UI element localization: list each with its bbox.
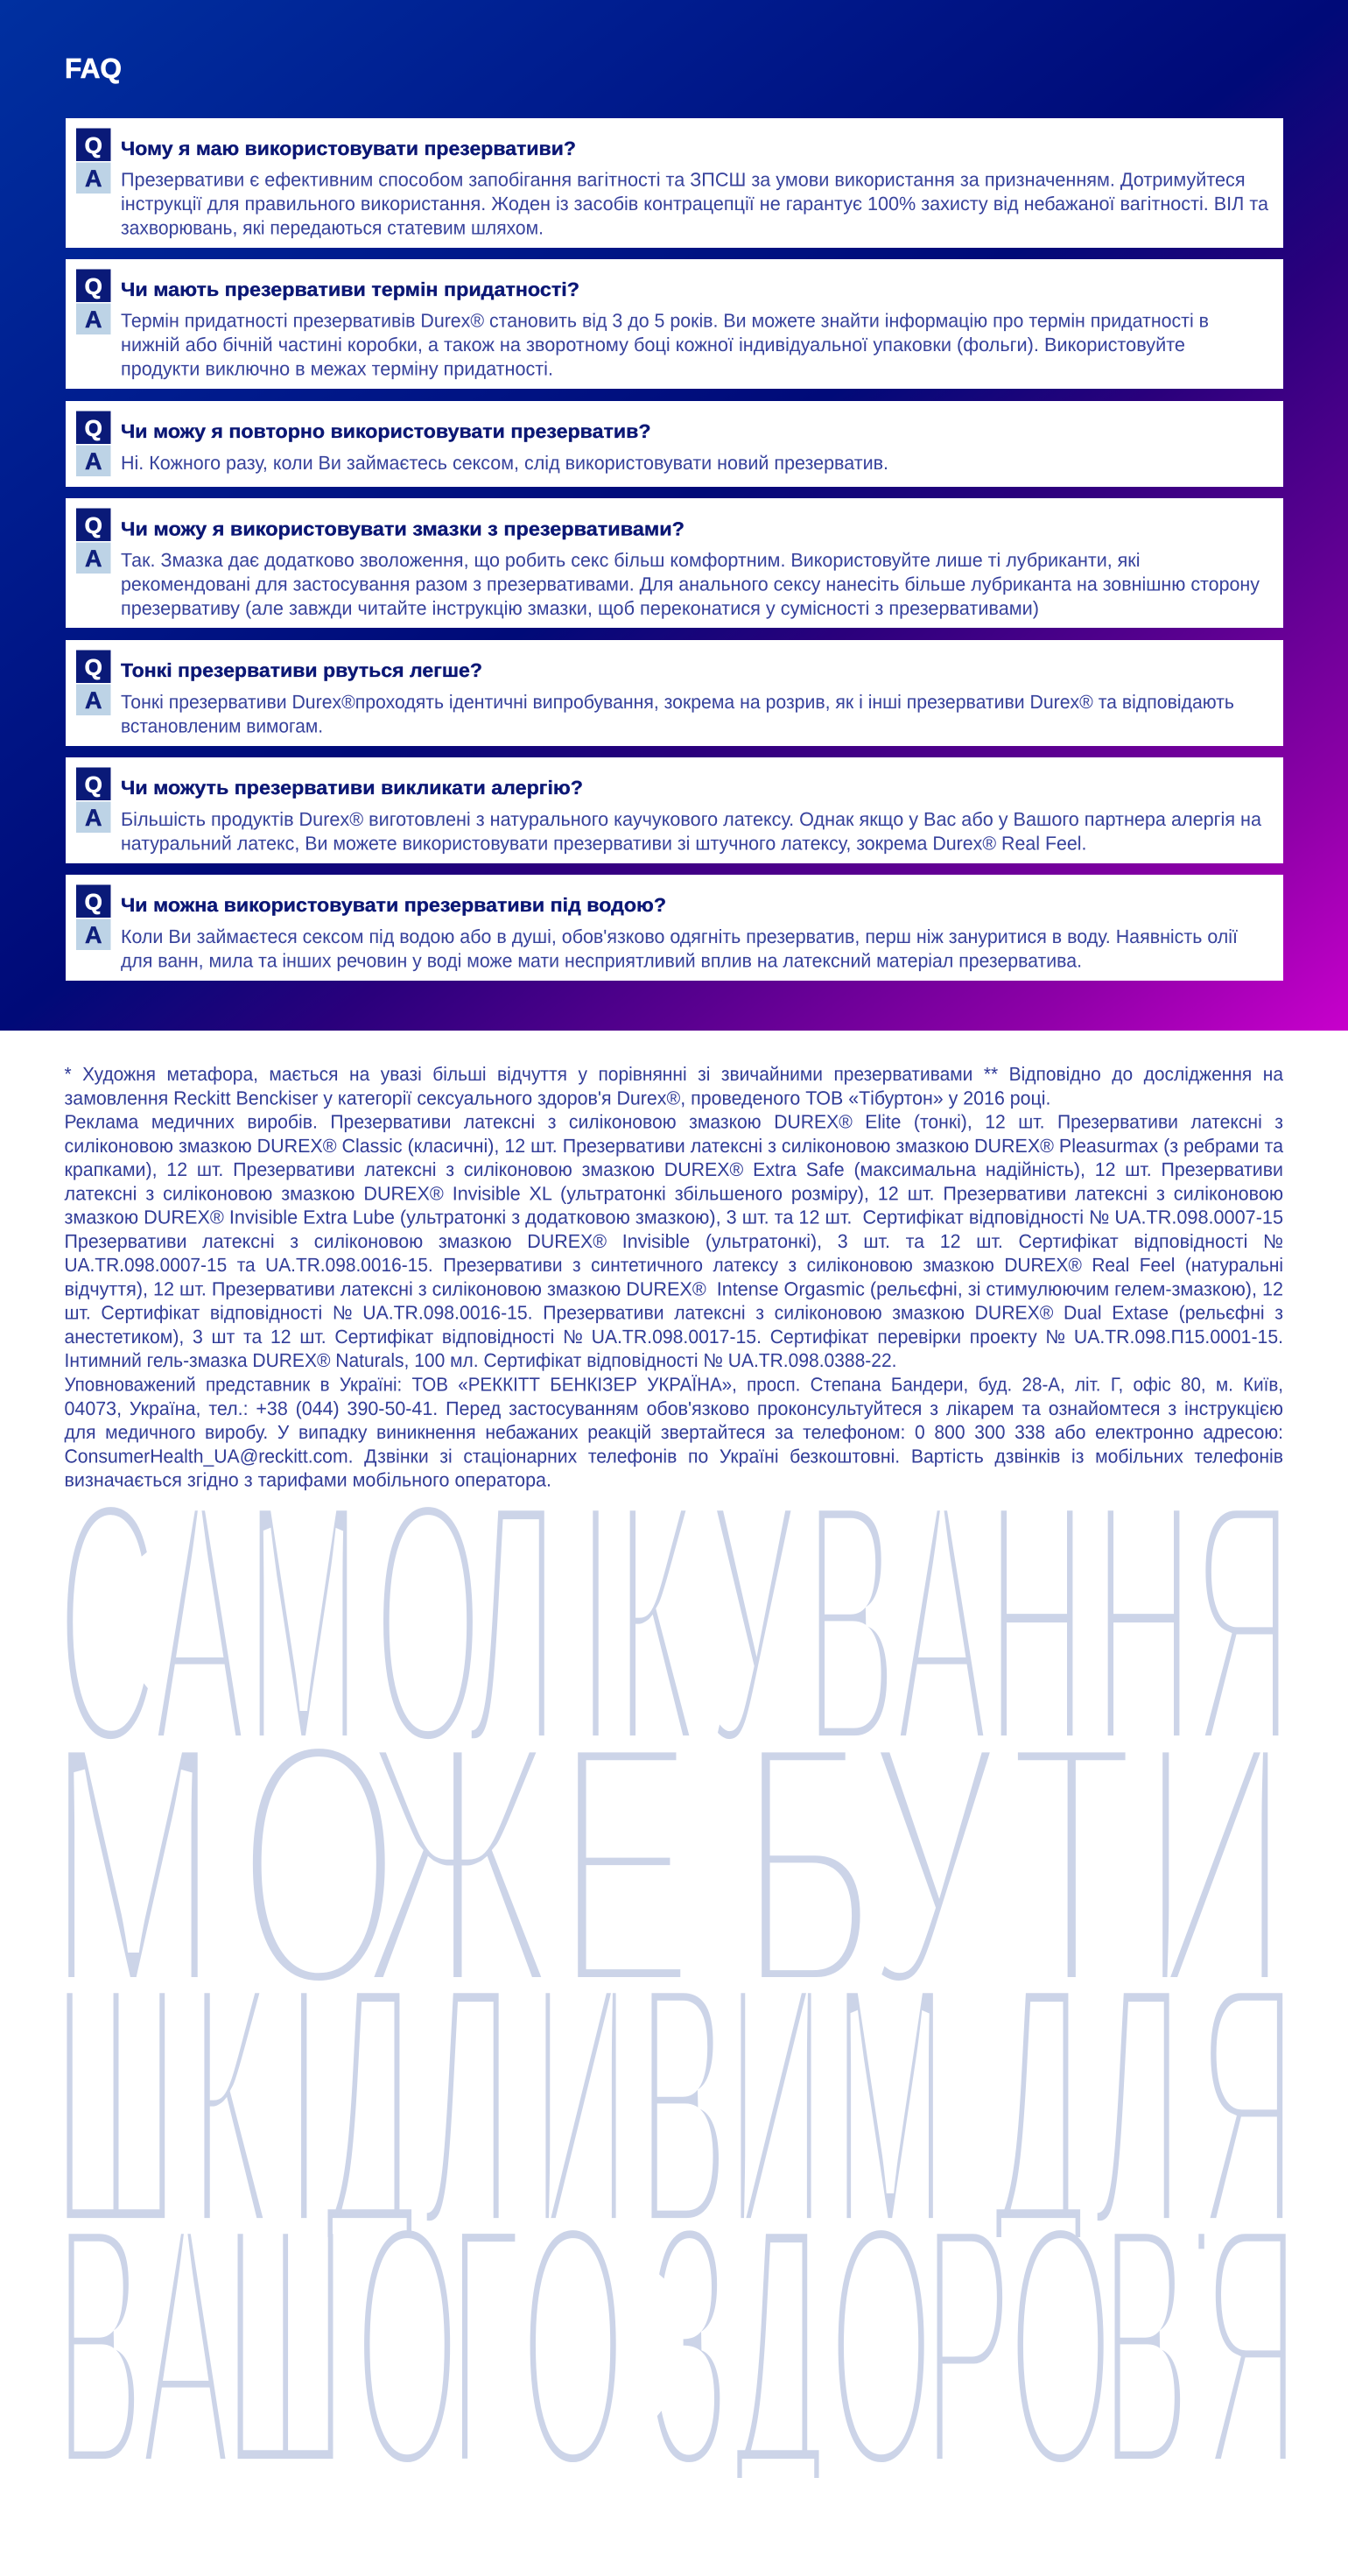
panel: question 7: для ванн, мила та інших речовин у воді може мати несприятливий вплив на латексний матеріал презерватива. <box>121 949 1082 972</box>
panel: question 2: Термін придатності презервативів Durex® становить від 3 до 5 років. Ви можете знайти інформацію про термін придатності в <box>121 310 1209 331</box>
panel: question 3: Ні. Кожного разу, коли Ви займаєтесь сексом, слід використовувати новий презерватив. <box>121 452 888 474</box>
panel: question 4 <box>66 498 1283 628</box>
panel: question 1: захворювань, які передаються статевим шляхом. <box>121 217 544 238</box>
footnotes and legal text: Презервативи латексні з силіконовою змазкою DUREX® Invisible (ультратонкі), 3 шт. та 12 шт. Сертифікат відповідності № <box>65 1230 1283 1252</box>
panel: question 4: Так. Змазка дає додатково зволоження, що робить секс більш комфортним. Використовуйте лише ті лубриканти, які <box>121 549 1140 571</box>
footnotes and legal text <box>65 1063 1284 1491</box>
footnotes and legal text: крапками), 12 шт. Презервативи латексні з силіконовою змазкою DUREX® Extra Safe (максимальна надійність), 12 шт. Презервативи <box>65 1158 1283 1180</box>
panel: question 2: Чи мають презервативи термін придатності? <box>121 278 579 300</box>
panel: question 4: презервативу (але завжди читайте інструкцію змазки, щоб переконатися у сумісності з презервативами) <box>121 597 1039 619</box>
panel: question 2: продукти виключно в межах терміну придатності. <box>121 357 553 380</box>
footnotes and legal text: анестетиком), 3 шт та 12 шт. Сертифікат відповідності № UA.TR.098.0017-15. Сертифікат перевірки проекту № UA.TR.098.П15.0001-15. <box>65 1326 1283 1348</box>
panel: question 4: A <box>85 545 102 572</box>
title: FAQ <box>65 53 122 84</box>
panel: question 3: Q <box>85 415 102 441</box>
panel: question 2 <box>66 259 1283 389</box>
large warning text: МОЖЕ БУТИ <box>46 1666 1290 2062</box>
footnotes and legal text: силіконовою змазкою DUREX® Classic (класичні), 12 шт. Презервативи латексні з силіконовою змазкою DUREX® Pleasurmax (з ребрами та <box>65 1135 1284 1157</box>
panel: question 2: A <box>85 306 102 333</box>
panel: question 5: Q <box>85 654 102 680</box>
footnotes and legal text: UA.TR.098.0007-15 та UA.TR.098.0016-15. Презервативи з синтетичного латексу з силіконовою змазкою DUREX® Real Feel (натуральні <box>65 1254 1283 1276</box>
footnotes and legal text: латексні з силіконовою змазкою DUREX® Invisible XL (ультратонкі збільшеного розміру), 12 шт. Презервативи латексні з силіконовою <box>65 1182 1283 1204</box>
panel: question 4: Чи можу я використовувати змазки з презервативами? <box>121 518 685 539</box>
panel: question 2: нижній або бічній частині коробки, а також на зворотному боці кожної індивідуальної упаковки (фольги). Використовуйте <box>121 334 1185 355</box>
panel: question 4: рекомендовані для застосування разом з презервативами. Для анального сексу нанесіть більше лубриканта на зовнішню сторону <box>121 573 1260 595</box>
panel: question 1: Q <box>85 132 102 158</box>
footnotes and legal text: Інтимний гель-змазка DUREX® Naturals, 100 мл. Сертифікат відповідності № UA.TR.098.0388-22. <box>65 1349 896 1371</box>
panel: question 1: Презервативи є ефективним способом запобігання вагітності та ЗПСШ за умови використання за призначенням. Дотримуйтеся <box>121 168 1246 191</box>
panel: question 1: інструкції для правильного використання. Жоден із засобів контрацепції не гарантує 100% захисту від небажаної вагітності. ВІЛ та <box>121 193 1269 215</box>
panel: question 5: Тонкі презервативи Durex®проходять ідентичні випробування, зокрема на розрив, як і інші презервативи Durex® та відповідають <box>121 691 1234 713</box>
panel: question 7: Коли Ви займаєтеся сексом під водою або в душі, обов'язково одягніть презерватив, перш ніж зануритися в воду. Наявність олії <box>121 926 1238 947</box>
panel: question 6: натуральний латекс, Ви можете використовувати презервативи зі штучного латексу, зокрема Durex® Real Feel. <box>121 832 1087 855</box>
panel: question 6: Q <box>85 771 102 798</box>
footnotes and legal text: визначається згідно з тарифами мобільного оператора. <box>65 1469 551 1491</box>
footnotes and legal text: 04073, Україна, тел.: +38 (044) 390-50-41. Перед застосуванням обов'язково проконсультуйтеся з лікарем та ознайомтеся з інструкцією <box>65 1397 1283 1419</box>
footnotes and legal text: ConsumerHealth_UA@reckitt.com. Дзвінки зі стаціонарних телефонів по Україні безкоштовні. Вартість дзвінків із мобільних телефонів <box>65 1445 1283 1467</box>
panel: question 6 <box>66 757 1283 863</box>
footnotes and legal text: для медичного виробу. У випадку виникнення небажаних реакцій звертайтеся за телефоном: 0 800 300 338 або електронно адресою: <box>65 1421 1283 1443</box>
footnotes and legal text: змазкою DUREX® Invisible Extra Lube (ультратонкі з додатковою змазкою), 3 шт. та 12 шт. Сертифікат відповідності № UA.TR.098.0007-15 <box>65 1207 1283 1228</box>
large warning text <box>67 1507 1286 2478</box>
panel: question 3 <box>66 401 1283 487</box>
large warning text: ВАШОГО ЗДОРОВ’Я <box>54 2150 1301 2545</box>
panel: question 7: Q <box>85 889 102 915</box>
panel: question 5: встановленим вимогам. <box>121 714 323 737</box>
footnotes and legal text: * Художня метафора, мається на увазі більші відчуття у порівнянні зі звичайними презервативами ** Відповідно до дослідження на <box>65 1063 1284 1085</box>
footnotes and legal text: відчуття), 12 шт. Презервативи латексні з силіконовою змазкою DUREX® Intense Orgasmic (рельєфні, зі стимулюючим гелем-змазкою), 12 <box>65 1277 1283 1299</box>
panel: question 2: Q <box>85 273 102 299</box>
panel: question 5: A <box>85 687 102 714</box>
panel: question 3: Чи можу я повторно використовувати презерватив? <box>121 420 651 442</box>
panel: question 5: Тонкі презервативи рвуться легше? <box>121 659 482 681</box>
footnotes and legal text: шт. Сертифікат відповідності № UA.TR.098.0016-15. Презервативи латексні з силіконовою змазкою DUREX® Dual Extase (рельєфні з <box>65 1302 1283 1324</box>
panel: question 1 <box>66 118 1283 248</box>
footnotes and legal text: Реклама медичних виробів. Презервативи латексні з силіконовою змазкою DUREX® Elite (тонкі), 12 шт. Презервативи латексні з <box>65 1110 1283 1133</box>
panel: question 1: A <box>85 165 102 192</box>
panel: question 7 <box>66 875 1283 981</box>
panel: question 3: A <box>85 448 102 475</box>
panel: question 6: Чи можуть презервативи викликати алергію? <box>121 777 583 799</box>
panel: question 7: A <box>85 922 102 948</box>
panel: question 6: Більшість продуктів Durex® виготовлені з натурального каучукового латексу. Однак якщо у Вас або у Вашого партнера алергія на <box>121 808 1262 830</box>
footnotes and legal text: Уповноважений представник в Україні: ТОВ «РЕККІТТ БЕНКІЗЕР УКРАЇНА», просп. Степана Бандери, буд. 28-А, літ. Г, офіс 80, м. Київ, <box>65 1373 1283 1396</box>
panel: question 5 <box>66 640 1283 746</box>
footnotes and legal text: замовлення Reckitt Benckiser у категорії сексуального здоров'я Durex®, проведеного ТОВ «Тібуртон» у 2016 році. <box>65 1087 1050 1109</box>
panel: question 4: Q <box>85 512 102 538</box>
panel: question 1: Чому я маю використовувати презервативи? <box>121 137 576 159</box>
gradient header background <box>0 0 1348 1031</box>
large warning text: ШКІДЛИВИМ ДЛЯ <box>52 1906 1298 2303</box>
panel: question 7: Чи можна використовувати презервативи під водою? <box>121 894 666 916</box>
large warning text: САМОЛІКУВАННЯ <box>56 1425 1294 1821</box>
panel: question 6: A <box>85 805 102 831</box>
